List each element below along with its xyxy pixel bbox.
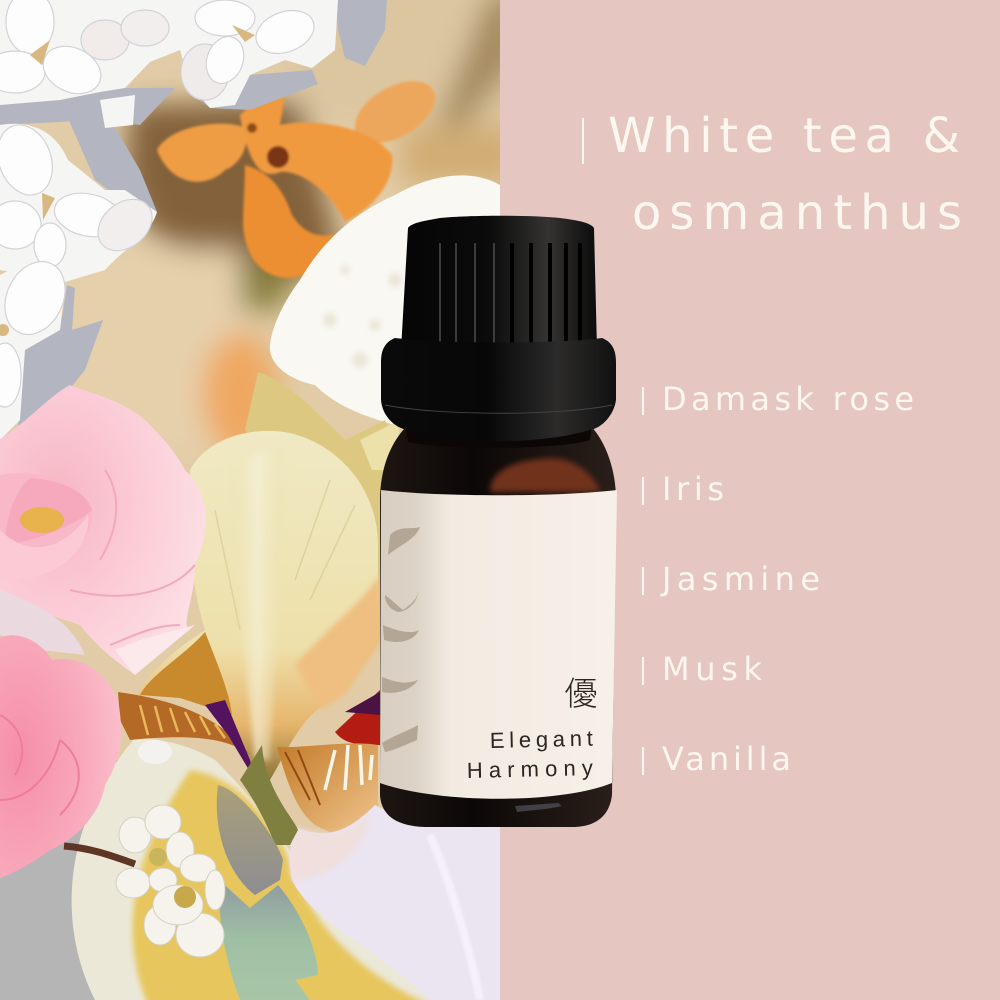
- ingredient: Musk: Musk: [662, 650, 762, 688]
- white blossoms lower: [116, 805, 225, 957]
- iris falls: [118, 690, 380, 835]
- white tea blossoms: gray under-petals: [0, 0, 387, 432]
- neck ring: [405, 425, 592, 448]
- ingredient: Iris: Iris: [662, 470, 724, 508]
- panel: scent notes background: [500, 0, 1000, 1000]
- iris standard petals: [138, 372, 405, 790]
- essential oil bottle: [380, 216, 617, 827]
- iris bud and stem: [217, 745, 318, 1000]
- bottle cap top: [401, 216, 597, 350]
- title: osmanthus: [632, 185, 962, 241]
- cap ribs: [440, 243, 494, 347]
- label side calligraphy: [382, 527, 420, 752]
- product name: Elegant: [490, 726, 593, 753]
- title: [582, 108, 962, 241]
- osmanthus flower: [157, 68, 446, 278]
- iris lower white petal: [290, 805, 500, 1000]
- white tea blossoms: white mass: [0, 0, 338, 440]
- pink camellia lower: [0, 590, 121, 880]
- bottle cap skirt: [381, 338, 616, 441]
- white tea blossom petal lines: [0, 0, 320, 407]
- ingredient: Jasmine: Jasmine: [660, 560, 820, 598]
- kanji: 優: [564, 675, 598, 712]
- bottle base highlight: [515, 803, 562, 812]
- white cup with yellow tea: [72, 738, 440, 1000]
- panel: floral collage: [0, 0, 520, 1000]
- ingredient: Vanilla: Vanilla: [662, 740, 791, 778]
- title: White tea &: [608, 108, 960, 164]
- product name second line: Harmony: [467, 755, 593, 783]
- pink camellia upper: [0, 385, 206, 675]
- bottle glass: [380, 425, 616, 827]
- ingredient list: [642, 380, 914, 778]
- bottle label: [380, 490, 617, 799]
- ingredient: Damask rose: Damask rose: [662, 380, 914, 418]
- white fluffy flower: [270, 175, 500, 430]
- branch: [64, 846, 135, 864]
- oil reflection: [490, 458, 600, 492]
